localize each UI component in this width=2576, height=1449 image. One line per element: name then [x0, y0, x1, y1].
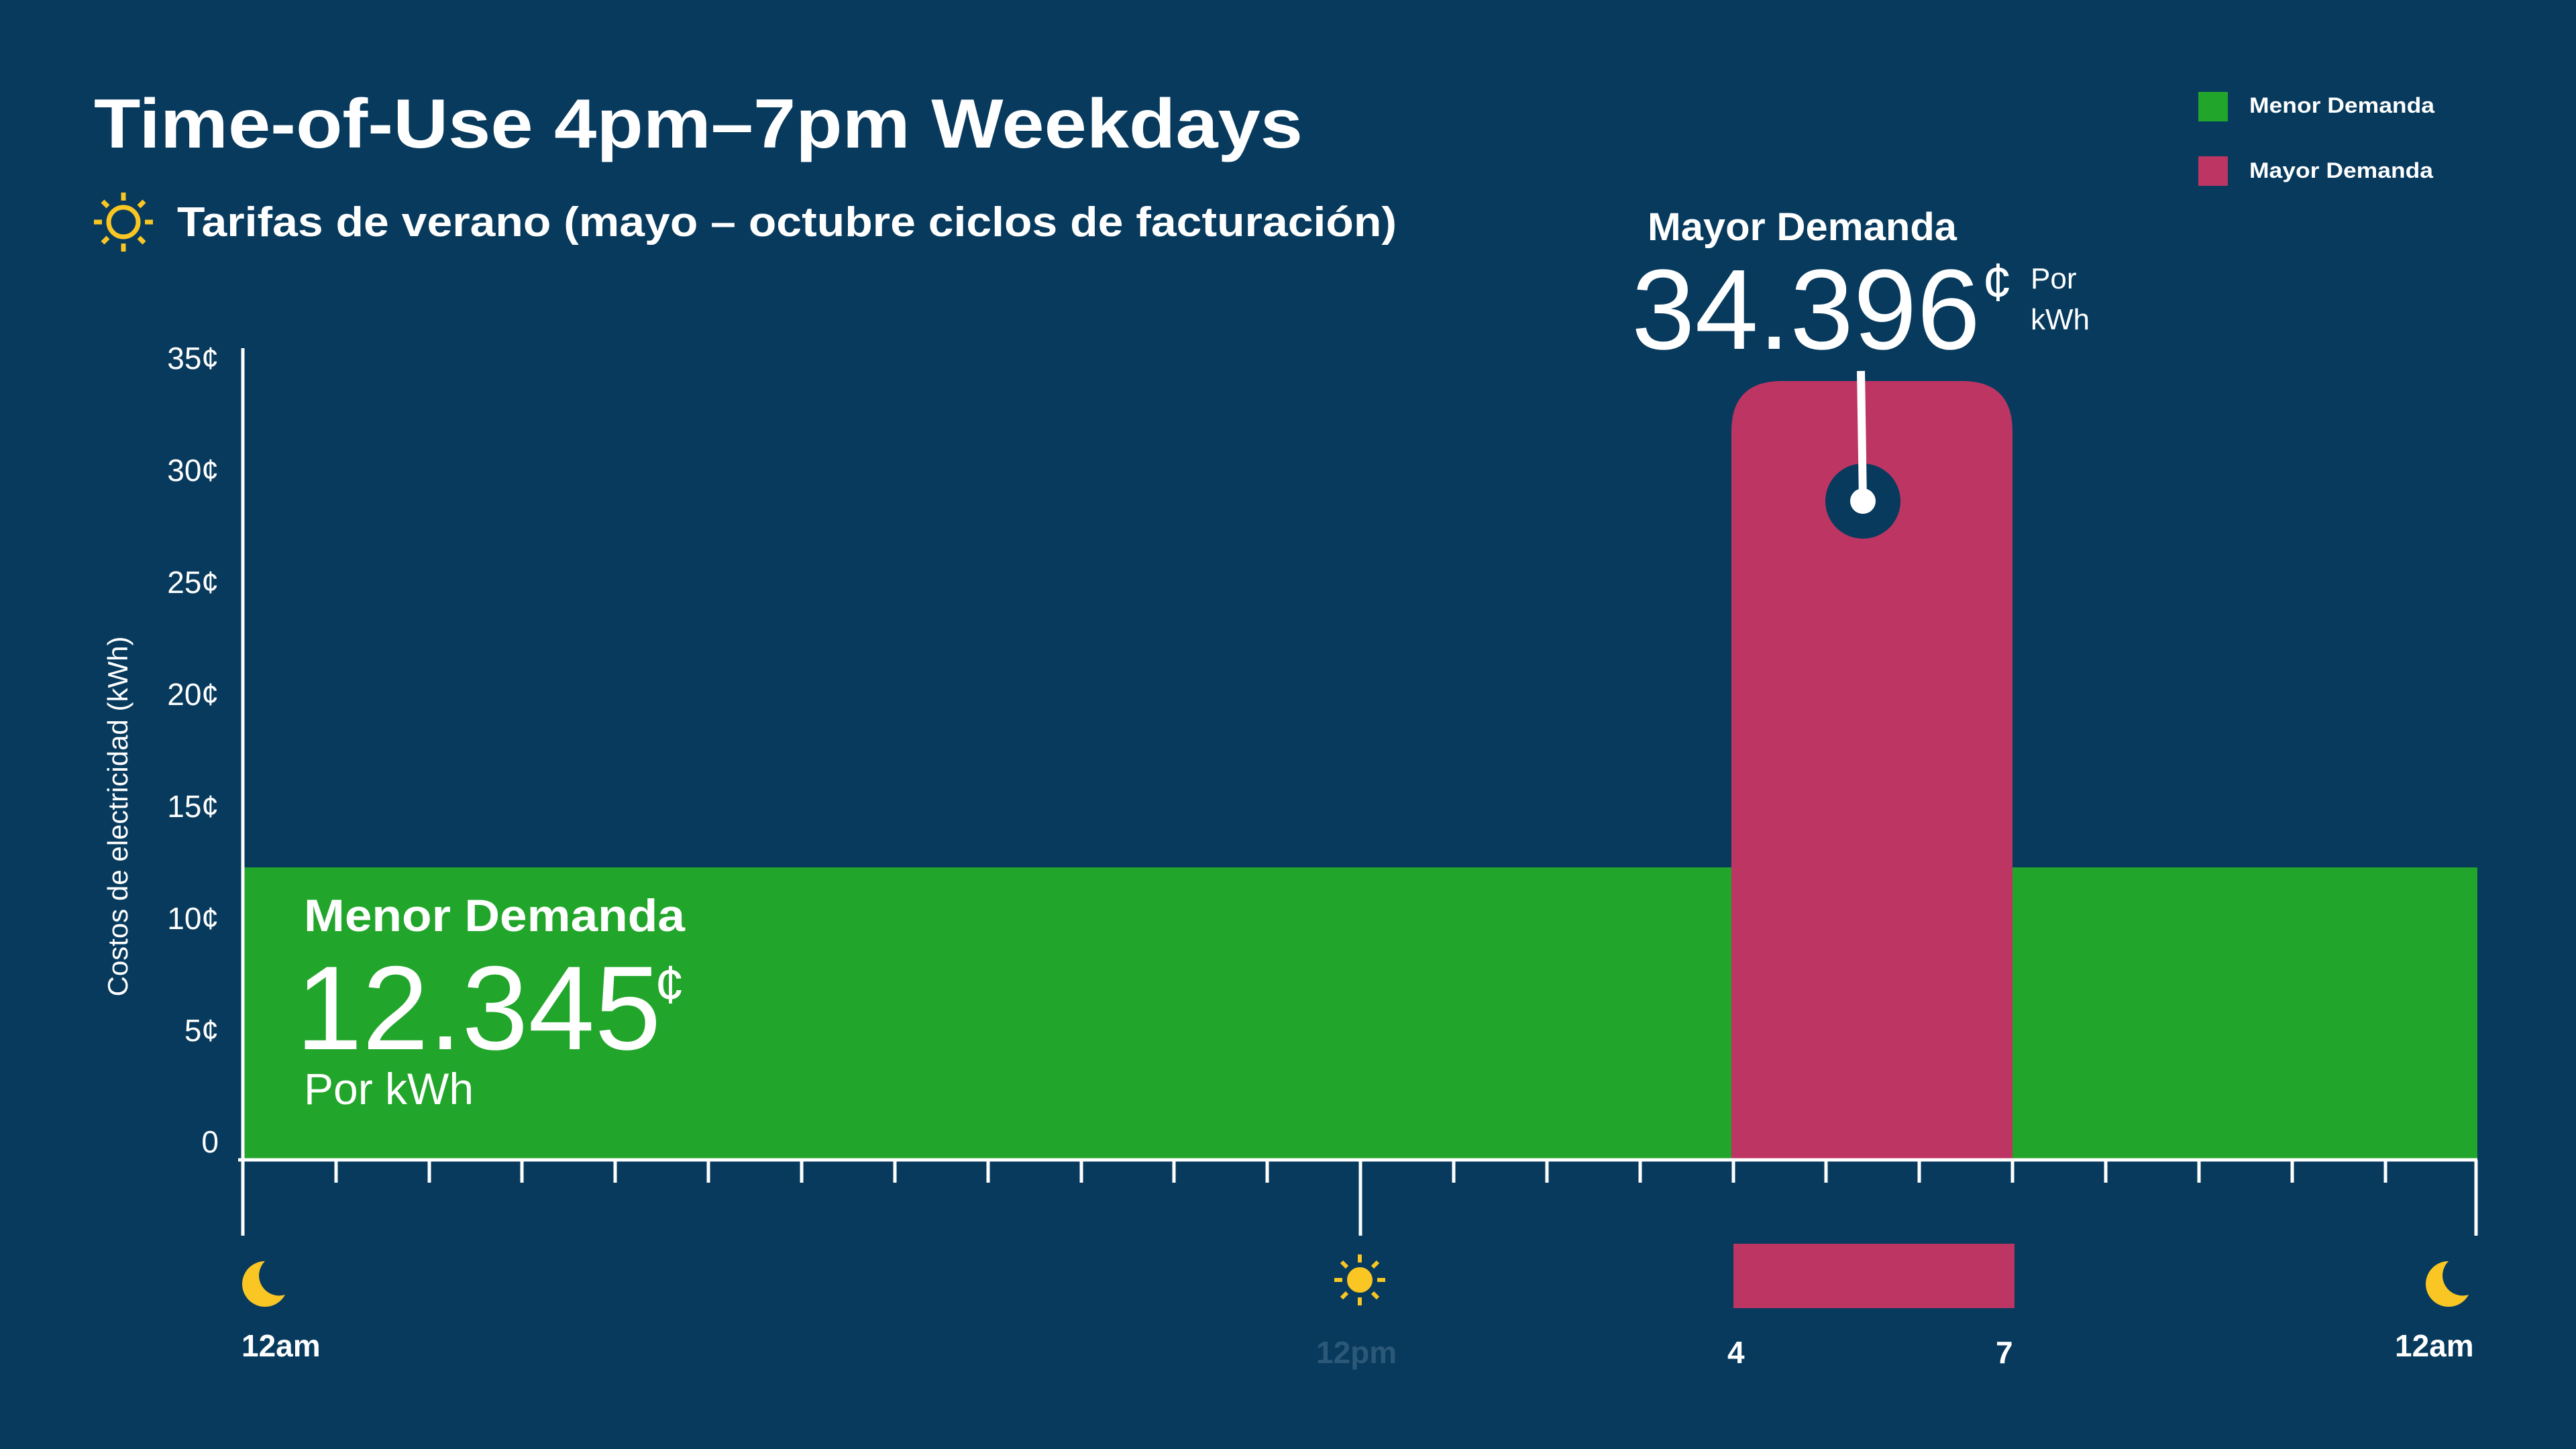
- text: menor demanda: [296, 890, 686, 1114]
- legend: Menor Demanda: [2249, 93, 2434, 117]
- bar: mayor demanda peak: [1731, 381, 2012, 1160]
- text: mayor demanda: [1631, 205, 2090, 374]
- text: mayor demanda: kWh: [2031, 303, 2090, 336]
- y-axis labels: 15¢: [167, 789, 219, 824]
- callout pointer: [1825, 371, 1900, 539]
- y-axis labels: 10¢: [167, 901, 219, 936]
- icon: sun subtitle: [94, 193, 153, 252]
- icon: moon right: [2426, 1261, 2469, 1307]
- y-axis labels: 35¢: [167, 341, 219, 376]
- text: menor demanda: Por kWh: [304, 1064, 474, 1114]
- subtitle: Tarifas de verano (mayo – octubre ciclos de facturación): [177, 199, 1397, 246]
- y-axis labels: 5¢: [184, 1013, 219, 1048]
- text: menor demanda: Menor Demanda: [304, 890, 686, 941]
- legend: Mayor Demanda: [2249, 158, 2433, 182]
- peak time block: [1733, 1244, 2015, 1308]
- y-axis labels: 0: [201, 1124, 219, 1159]
- y-axis labels: [167, 341, 219, 1159]
- x-axis labels: 7: [1996, 1335, 2013, 1370]
- x-axis labels: 12am: [241, 1328, 321, 1363]
- icon: sun noon: [1334, 1254, 1385, 1305]
- bar: menor demanda area: [243, 867, 2477, 1160]
- text: menor demanda: 12.345: [296, 941, 661, 1075]
- icon: moon left: [242, 1261, 285, 1307]
- y-axis labels: 30¢: [167, 453, 219, 488]
- text: mayor demanda: 34.396: [1631, 246, 1980, 374]
- x-axis labels: [241, 1328, 2474, 1370]
- x-axis labels: 4: [1727, 1335, 1745, 1370]
- text: menor demanda: ¢: [655, 955, 684, 1014]
- text: mayor demanda: Por: [2031, 262, 2076, 295]
- text: mayor demanda: ¢: [1982, 252, 2012, 312]
- title: Time-of-Use 4pm–7pm Weekdays: [94, 85, 1303, 163]
- axes: [238, 348, 2477, 1236]
- y-axis title: Costos de electricidad (kWh): [102, 637, 133, 996]
- x-axis labels: 12pm: [1316, 1335, 1397, 1370]
- text: mayor demanda: Mayor Demanda: [1648, 205, 1957, 249]
- legend: [2198, 92, 2434, 186]
- x-axis labels: 12am: [2395, 1328, 2474, 1363]
- y-axis labels: 20¢: [167, 677, 219, 712]
- y-axis labels: 25¢: [167, 565, 219, 600]
